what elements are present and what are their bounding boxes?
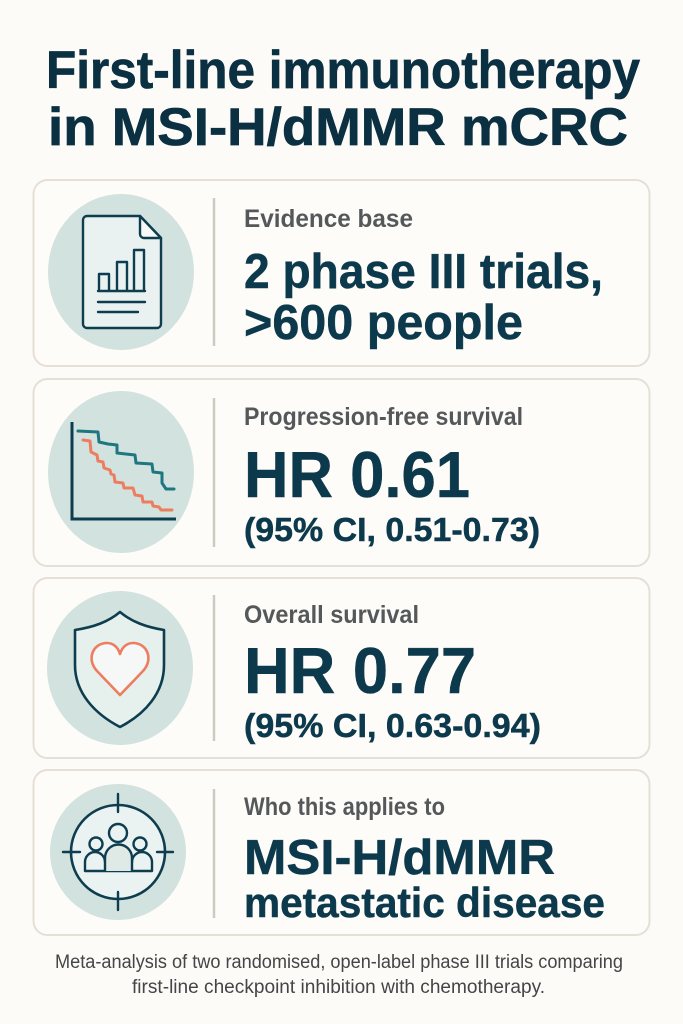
icon: shield with heart [47, 591, 193, 745]
title: in MSI-H/dMMR mCRC [48, 98, 628, 157]
confidence interval: PFS: (95% CI, 0.51-0.73) [244, 511, 540, 548]
stat: PFS hazard ratio: HR 0.61 [244, 438, 470, 511]
footnote [55, 952, 623, 998]
panel: progression-free survival [34, 379, 650, 566]
stat: population: metastatic disease [244, 879, 605, 926]
stat: trials and people: >600 people [244, 296, 523, 350]
label: who this applies to: Who this applies to [244, 793, 445, 821]
panel: who this applies to [34, 770, 650, 935]
label: evidence base: Evidence base [244, 205, 413, 233]
icon: target with people [50, 784, 186, 920]
title [46, 41, 640, 157]
stat: OS hazard ratio: HR 0.77 [244, 634, 476, 707]
title: First-line immunotherapy [46, 41, 640, 100]
stat: trials and people: 2 phase III trials, [244, 245, 603, 299]
icon: document with bar chart [48, 194, 194, 350]
stat: population [244, 831, 605, 926]
stat: population: MSI-H/dMMR [244, 831, 555, 885]
panel: evidence base [34, 180, 650, 366]
panel: overall survival [34, 578, 650, 758]
label: overall survival: Overall survival [244, 601, 419, 629]
footnote: Meta-analysis of two randomised, open-label phase III trials comparing [55, 952, 623, 973]
confidence interval: OS: (95% CI, 0.63-0.94) [244, 707, 541, 744]
icon: survival curves [48, 391, 194, 553]
label: progression-free survival: Progression-free survival [244, 403, 523, 431]
stat: trials and people [244, 245, 603, 350]
footnote: first-line checkpoint inhibition with chemotherapy. [132, 977, 545, 998]
